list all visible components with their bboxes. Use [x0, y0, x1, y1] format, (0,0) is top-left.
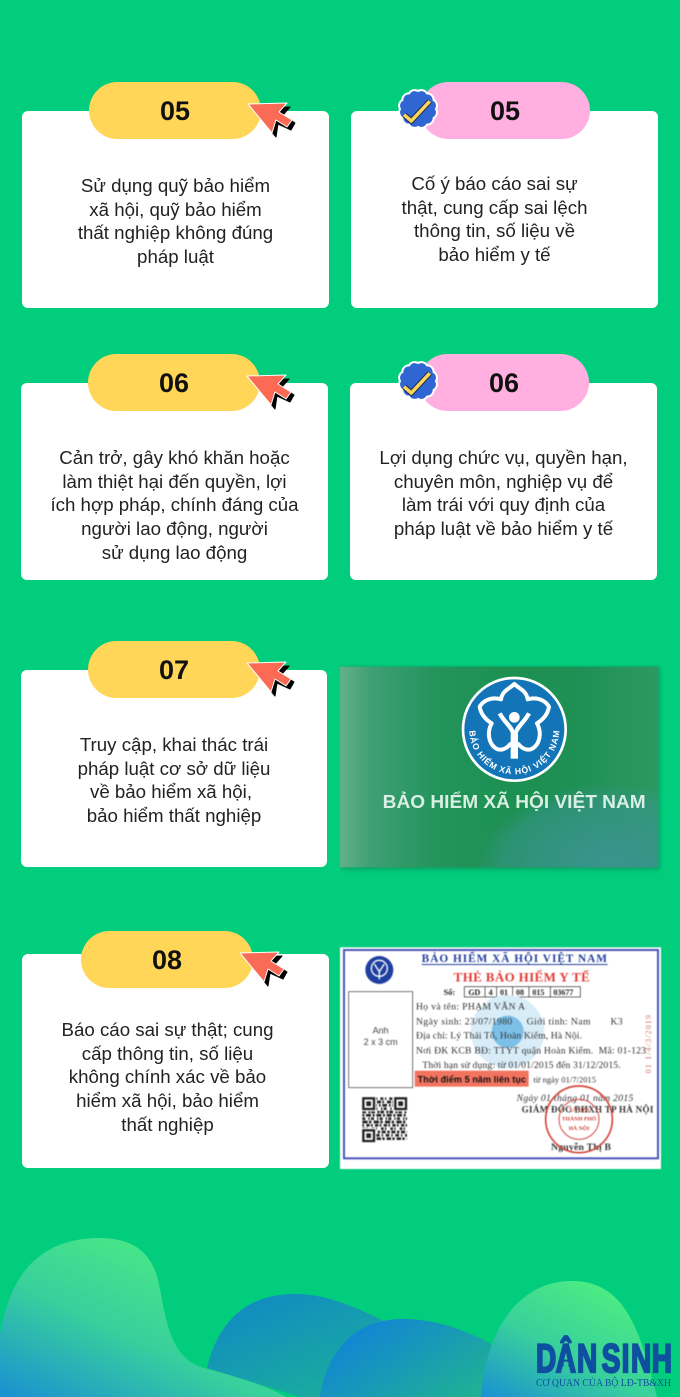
image: health insurance card: 08 — [516, 988, 524, 997]
text: left 05: pháp luật — [137, 246, 214, 267]
heading pill: left 06 — [88, 354, 260, 411]
logo: round emblem — [462, 676, 567, 782]
text: left 08: thất nghiệp — [121, 1114, 214, 1135]
text: left 07: pháp luật cơ sở dữ liệu — [78, 758, 270, 779]
text: left 05: Sử dụng quỹ bảo hiểm — [81, 175, 270, 196]
panel: right 05 — [351, 111, 658, 308]
text: right 06: Lợi dụng chức vụ, quyền hạn, — [379, 447, 628, 468]
text: left 05 — [78, 175, 273, 267]
panel: right 06 — [350, 383, 657, 580]
text: left 06: người lao động, người — [81, 518, 268, 539]
text: left 08: cấp thông tin, số liệu — [82, 1043, 253, 1064]
text: left 08: Báo cáo sai sự thật; cung — [62, 1019, 273, 1040]
text: left 07: Truy cập, khai thác trái — [80, 734, 268, 755]
image: health insurance card: GIÁM ĐỐC BHXH TP HÀ NỘI — [522, 1104, 654, 1114]
image: health insurance card: Địa chỉ: Lý Thái Tổ, Hoàn Kiếm, Hà Nội. — [416, 1031, 582, 1042]
image: health insurance card: 01 1/4/3/2019 — [644, 1015, 653, 1073]
text: left 08: hiểm xã hội, bảo hiểm — [76, 1090, 259, 1111]
heading pill: left 06: 06 — [159, 368, 189, 398]
image: health insurance card: Thời hạn sử dụng: từ 01/01/2015 đến 31/12/2015. — [422, 1060, 621, 1071]
image: health insurance card: 4 — [489, 988, 493, 997]
panel: left 08 — [22, 954, 329, 1168]
image: health insurance card: Số: — [444, 988, 455, 997]
image: health insurance card: 2 x 3 cm — [364, 1037, 398, 1047]
text: left 06: Cản trở, gây khó khăn hoặc — [59, 447, 290, 468]
image: Vietnam Social Security banner — [340, 665, 662, 872]
image: health insurance card: Ngày sinh: 23/07/1980 Giới tính: Nam K3 — [416, 1017, 623, 1028]
icon: cursor arrow 4 — [240, 952, 288, 986]
text: left 08: không chính xác về bảo — [69, 1066, 266, 1087]
text: left 06: làm thiệt hại đến quyền, lợi — [62, 471, 287, 492]
icon: cursor arrow 1 — [248, 102, 296, 138]
heading pill: left 08: 08 — [152, 945, 182, 975]
QR code — [361, 1096, 408, 1143]
text: right 05: thông tin, số liệu về — [414, 220, 575, 241]
heading pill: left 07: 07 — [159, 655, 189, 685]
decorative hills background — [0, 1238, 657, 1397]
text: right 06: chuyên môn, nghiệp vụ để — [394, 471, 613, 492]
text: right 06: làm trái với quy định của — [402, 494, 605, 515]
text: left 08 — [62, 1019, 273, 1135]
image: health insurance card: THẺ BẢO HIỂM Y TẾ — [454, 969, 590, 984]
icon: check badge 1 — [398, 89, 438, 128]
heading pill: left 05: 05 — [160, 96, 190, 126]
image: health insurance card: Ngày 01 tháng 01 năm 2015 — [516, 1093, 634, 1104]
heading pill: left 07 — [88, 641, 260, 698]
image: health insurance card: XÃ HỘI — [569, 1106, 590, 1114]
image: health insurance card — [339, 946, 662, 1170]
image: health insurance card: HÀ NỘI — [569, 1124, 590, 1132]
text: left 07: về bảo hiểm xã hội, — [90, 781, 252, 802]
icon: check badge 2 — [398, 361, 438, 400]
text: left 06: ích hợp pháp, chính đáng của — [50, 494, 299, 515]
image: health insurance card: Nguyễn Thị B — [551, 1142, 612, 1153]
logo: round emblem: BẢO HIỂM XÃ HỘI VIỆT NAM — [469, 730, 560, 774]
image: health insurance card: 015 — [532, 988, 544, 997]
text: right 05: Cố ý báo cáo sai sự — [411, 173, 578, 194]
heading pill: left 05 — [89, 82, 261, 139]
icon: cursor arrow 3 — [246, 662, 294, 696]
heading pill: right 05: 05 — [490, 96, 520, 126]
image: health insurance card: 01 — [500, 988, 508, 997]
image: health insurance card: Thời điểm 5 năm liên tục — [418, 1075, 526, 1085]
panel: left 07 — [21, 670, 327, 867]
image: health insurance card: từ ngày 01/7/2015 — [533, 1075, 596, 1084]
text: right 06 — [379, 447, 628, 539]
heading pill: left 08 — [81, 931, 253, 988]
text: left 05: xã hội, quỹ bảo hiểm — [89, 199, 262, 220]
panel: left 06 — [21, 383, 328, 580]
text: left 06 — [50, 447, 299, 563]
image: health insurance card: 03677 — [553, 988, 573, 997]
logo: Dan Sinh — [536, 1335, 672, 1389]
image: health insurance card: BẢO HIỂM XÃ HỘI VIỆT NAM — [422, 952, 608, 965]
image: health insurance card: GD — [468, 988, 481, 997]
text: right 06: pháp luật về bảo hiểm y tế — [394, 518, 613, 539]
text: right 05: thật, cung cấp sai lệch — [402, 197, 587, 218]
heading pill: right 06: 06 — [489, 368, 519, 398]
heading pill: right 05 — [420, 82, 590, 139]
image: health insurance card: Nơi ĐK KCB BĐ: TTYT quận Hoàn Kiếm. Mã: 01-123 — [416, 1046, 646, 1057]
text: left 06: sử dụng lao động — [102, 542, 247, 563]
text: left 05: thất nghiệp không đúng — [78, 222, 273, 243]
panel: left 05 — [22, 111, 329, 308]
text: left 07 — [78, 734, 270, 826]
image: health insurance card: THÀNH PHỐ — [562, 1115, 597, 1123]
banner title: BẢO HIỂM XÃ HỘI VIỆT NAM — [383, 791, 646, 812]
image: health insurance card: Họ và tên: PHẠM VĂN A — [416, 1001, 525, 1013]
logo wordmark: DÂN SINH — [536, 1335, 672, 1381]
icon: cursor arrow 2 — [246, 374, 294, 410]
image: health insurance card: Anh — [373, 1025, 389, 1035]
logo wordmark: CƠ QUAN CỦA BỘ LĐ-TB&XH — [536, 1377, 671, 1389]
text: right 05: bảo hiểm y tế — [438, 244, 551, 265]
text: left 07: bảo hiểm thất nghiệp — [87, 805, 261, 826]
heading pill: right 06 — [419, 354, 589, 411]
text: right 05 — [402, 173, 587, 265]
